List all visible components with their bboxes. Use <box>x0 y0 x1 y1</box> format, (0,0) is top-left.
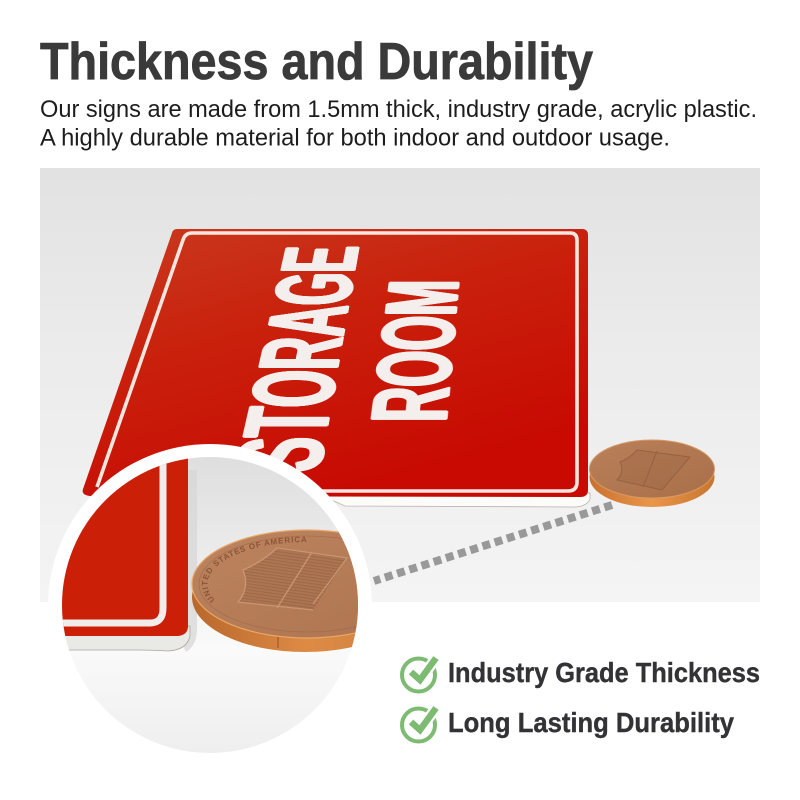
magnified inset circle <box>48 444 372 753</box>
inset: sign white border <box>60 450 163 623</box>
coin <box>590 440 714 507</box>
photo background <box>40 168 760 602</box>
title: Thickness and Durability <box>40 33 593 91</box>
inset: coin: UNITED STATES OF AMERICA <box>202 536 306 603</box>
subtitle: A highly durable material for both indoor and outdoor usage. <box>40 124 670 152</box>
sign red face <box>83 229 588 497</box>
subtitle: Our signs are made from 1.5mm thick, industry grade, acrylic plastic. <box>40 96 757 123</box>
inset: coin <box>191 529 358 652</box>
inset: sign right-side shadow <box>184 478 197 652</box>
inset: sign red face <box>60 450 188 636</box>
sign text: STORAGE: STORAGE <box>210 246 382 472</box>
sign white border line <box>97 233 577 491</box>
inset: sign white edge <box>60 626 190 651</box>
dotted pointer line <box>374 505 612 581</box>
subtitle <box>40 96 757 152</box>
sign thickness edge <box>320 493 590 507</box>
checklist item 1: Industry Grade Thickness <box>448 657 760 688</box>
icon: green check 1 <box>402 658 436 692</box>
icon: green check 2 <box>402 708 436 742</box>
checklist item 2: Long Lasting Durability <box>448 707 734 738</box>
sign text: ROOM: ROOM <box>348 280 481 422</box>
